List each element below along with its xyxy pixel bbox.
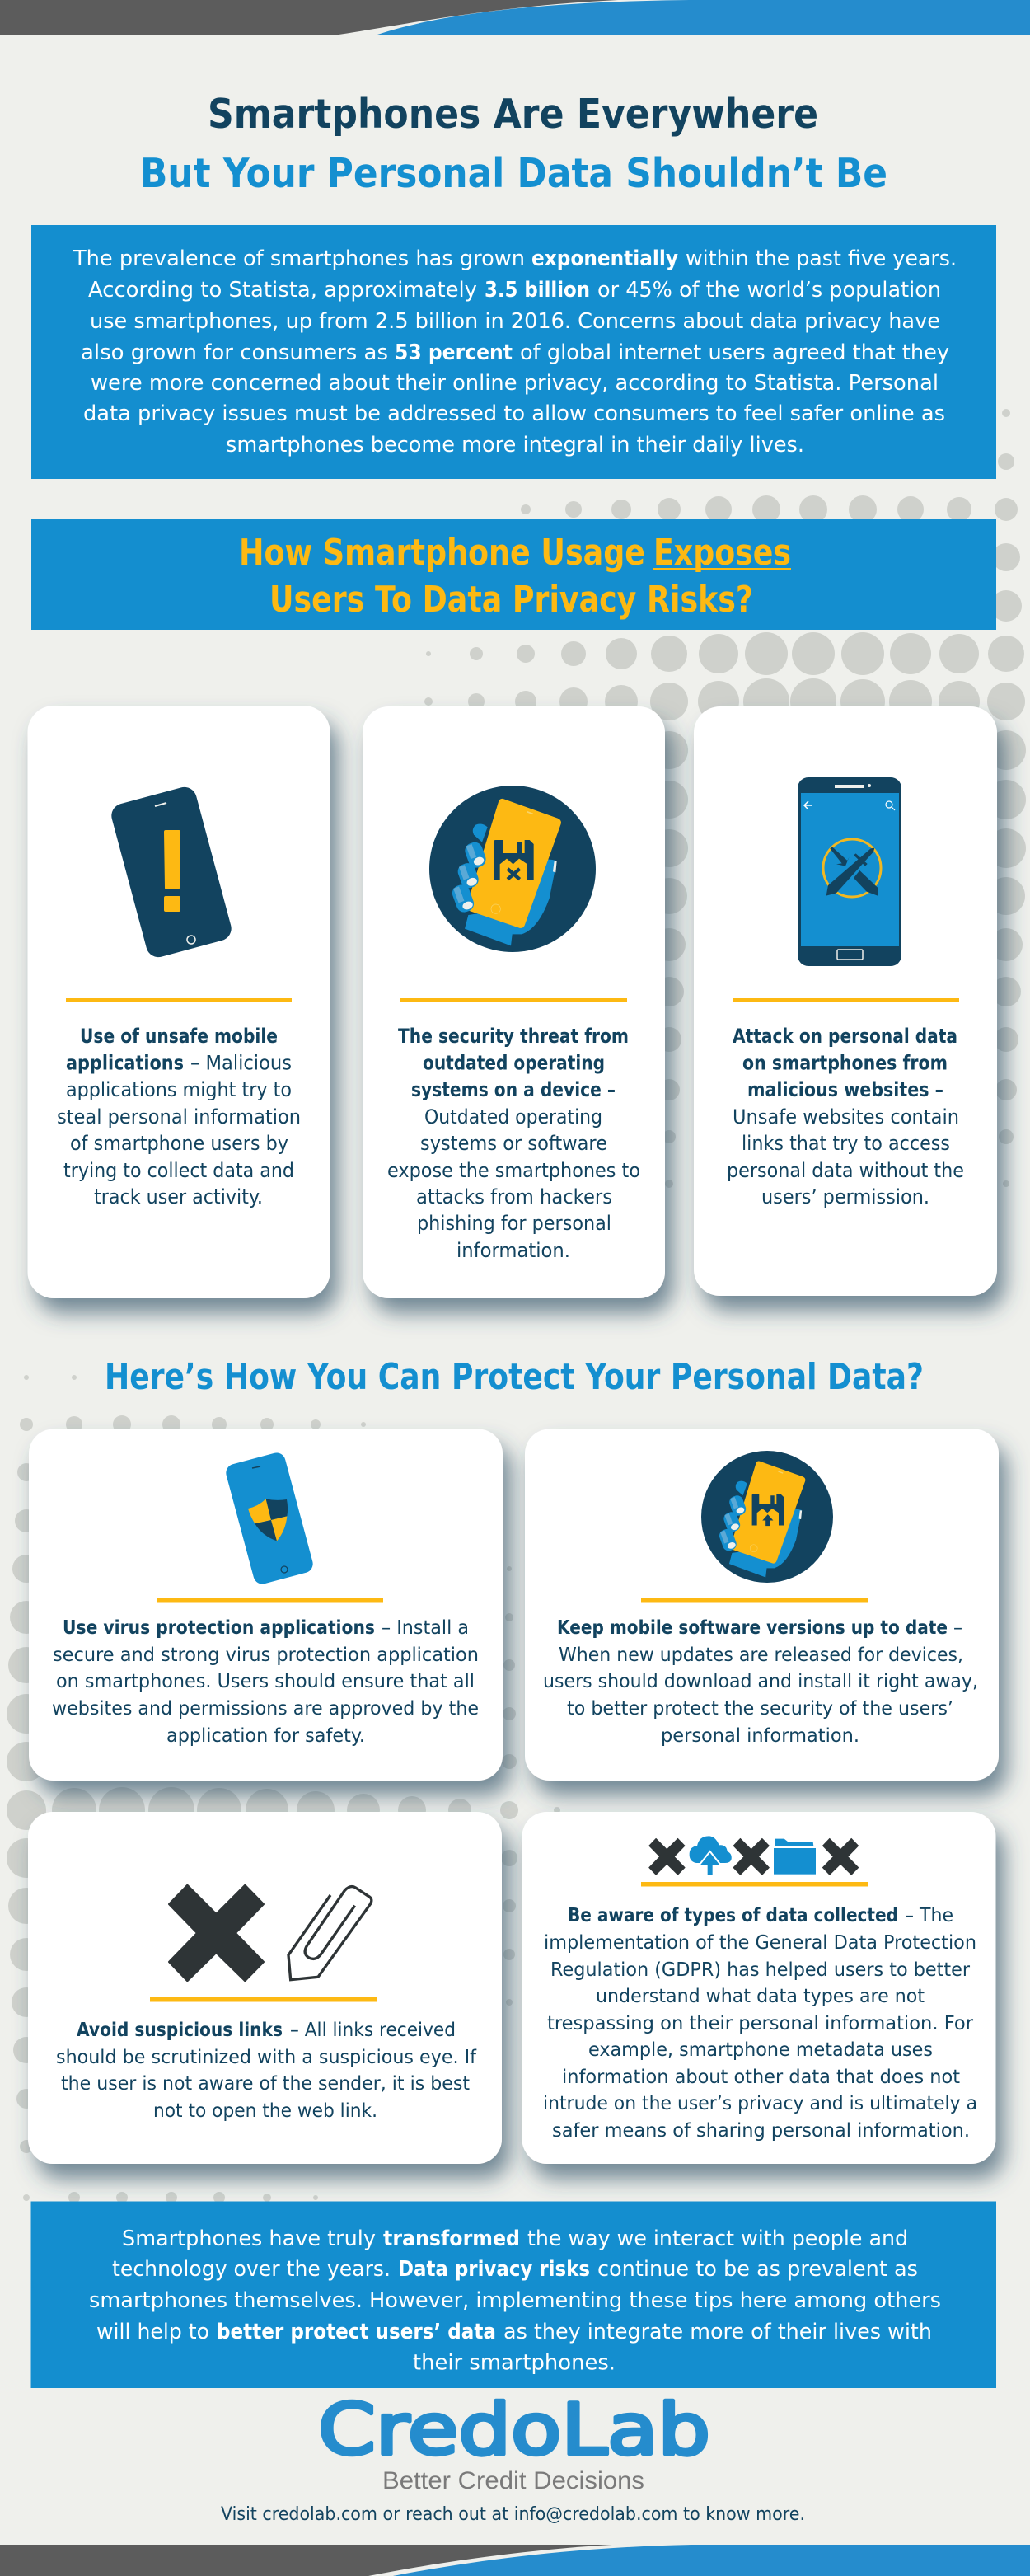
card text: malicious websites – (747, 1078, 943, 1101)
card text: trying to collect data and (63, 1159, 294, 1182)
top banner swoosh (0, 0, 1030, 35)
bottom banner swoosh (0, 2545, 1030, 2576)
card text: information. (456, 1239, 570, 1262)
card text (387, 1025, 640, 1262)
heading text: How Smartphone Usage (239, 532, 645, 574)
halftone dots lower left (7, 1375, 560, 2203)
card text: the user is not aware of the sender, it is best (61, 2073, 470, 2095)
card text: Unsafe websites contain (733, 1105, 959, 1128)
panel: risks heading (31, 519, 996, 630)
card text: systems or software (420, 1132, 607, 1155)
card text: steal personal information (57, 1105, 301, 1128)
card text: trespassing on their personal information. For (547, 2013, 974, 2034)
title (140, 91, 887, 197)
card text: outdated operating (423, 1052, 605, 1075)
card text (56, 2020, 477, 2122)
panel: suspicious links (28, 1812, 502, 2164)
panel: outdated operating systems (363, 706, 665, 1298)
footer call to action: Visit credolab.com or reach out at info@credolab.com to know more. (221, 2504, 805, 2525)
card text (57, 1025, 301, 1208)
heading text (239, 532, 791, 621)
introduction text: 53 percent (395, 340, 513, 365)
introduction text: data privacy issues must be addressed to allow consumers to feel safer online as (83, 401, 945, 426)
card text: Attack on personal data (733, 1025, 957, 1048)
panel: conclusion (31, 2201, 996, 2388)
card text: – All links received (290, 2020, 456, 2041)
card text: understand what data types are not (596, 1986, 925, 2007)
card text: applications might try to (66, 1078, 292, 1101)
conclusion text: will help to (96, 2320, 209, 2344)
introduction text: 3.5 billion (485, 278, 590, 303)
logo wordmark: CredoLab (318, 2389, 710, 2471)
card text: Use of unsafe mobile (80, 1025, 278, 1048)
card text: Use virus protection applications (63, 1617, 375, 1639)
card text: safer means of sharing personal information. (552, 2120, 970, 2142)
introduction text: According to Statista, approximately (88, 278, 477, 303)
introduction text: were more concerned about their online privacy, according to Statista. Personal (91, 371, 939, 396)
conclusion text: transformed (383, 2226, 520, 2251)
logo tagline: Better Credit Decisions (382, 2467, 644, 2494)
card text: secure and strong virus protection application (53, 1645, 479, 1666)
panel: software updates (525, 1429, 999, 1781)
card text: intrude on the user’s privacy and is ultimately a (543, 2093, 977, 2114)
icon: phone with crossed swords (798, 777, 901, 966)
card text: of smartphone users by (70, 1132, 288, 1155)
card text: phishing for personal (417, 1212, 611, 1235)
conclusion text (89, 2226, 941, 2376)
card text: track user activity. (94, 1185, 263, 1208)
title: Smartphones Are Everywhere (208, 91, 818, 138)
card text: on smartphones. Users should ensure that all (56, 1671, 475, 1692)
card text: websites and permissions are approved by the (52, 1698, 479, 1720)
conclusion text: as they integrate more of their lives with (503, 2320, 932, 2344)
conclusion text: technology over the years. (112, 2257, 391, 2282)
card text (52, 1617, 479, 1747)
introduction text: within the past five years. (686, 246, 957, 271)
card text: users’ permission. (761, 1185, 929, 1208)
card text: links that try to access (742, 1132, 950, 1155)
card text: applications (66, 1052, 184, 1075)
introduction text: smartphones become more integral in their daily lives. (226, 433, 804, 457)
card text: – The (905, 1905, 953, 1926)
card text: personal data without the (727, 1159, 964, 1182)
card text: expose the smartphones to (387, 1159, 640, 1182)
card text: – Install a (382, 1617, 469, 1639)
card text: implementation of the General Data Protection (544, 1932, 976, 1954)
introduction text: exponentially (531, 246, 678, 271)
card text: on smartphones from (742, 1052, 948, 1075)
conclusion text: their smartphones. (413, 2351, 616, 2376)
conclusion text: Smartphones have truly (122, 2226, 376, 2251)
card text (543, 1617, 978, 1747)
icon: crosses with cloud and folder (649, 1836, 859, 1875)
title: But Your Personal Data Shouldn’t Be (140, 150, 887, 197)
conclusion text: the way we interact with people and (527, 2226, 908, 2251)
introduction text: use smartphones, up from 2.5 billion in 2016. Concerns about data privacy have (90, 309, 940, 334)
panel: virus protection (29, 1429, 503, 1781)
introduction text: also grown for consumers as (81, 340, 388, 365)
card text: to better protect the security of the users’ (567, 1698, 953, 1720)
card text: When new updates are released for devices, (559, 1645, 963, 1666)
card text: Avoid suspicious links (77, 2020, 283, 2041)
card text: Keep mobile software versions up to date (557, 1617, 948, 1639)
icon: phone with exclamation mark (109, 785, 234, 960)
icon: hand holding phone with damaged floppy (429, 786, 596, 952)
panel: malicious websites (694, 706, 997, 1296)
introduction text (73, 246, 957, 457)
card text: Outdated operating (424, 1105, 602, 1128)
card text: attacks from hackers (416, 1185, 612, 1208)
conclusion text: better protect users’ data (217, 2320, 496, 2344)
panel: introduction (31, 225, 996, 479)
card text: The security threat from (398, 1025, 629, 1048)
panel: types of data collected (522, 1812, 995, 2164)
halftone dots upper right (424, 409, 1026, 1188)
heading text: Users To Data Privacy Risks? (269, 579, 753, 621)
card text: application for safety. (166, 1725, 365, 1747)
heading text: Exposes (653, 532, 791, 574)
icon: cross and paperclip (169, 1885, 372, 1981)
card text: systems on a device – (411, 1078, 616, 1101)
card text: Be aware of types of data collected (568, 1905, 898, 1926)
card text: not to open the web link. (153, 2100, 377, 2122)
card text (727, 1025, 964, 1208)
card text: users should download and install it right away, (543, 1671, 978, 1692)
conclusion text: Data privacy risks (398, 2257, 590, 2282)
card text: information about other data that does not (562, 2067, 960, 2088)
introduction text: or 45% of the world’s population (597, 278, 941, 303)
icon: hand holding phone with floppy upload (701, 1451, 833, 1583)
icon: phone with shield (224, 1451, 315, 1586)
card text: – (953, 1617, 962, 1639)
conclusion text: continue to be as prevalent as (597, 2257, 918, 2282)
card text: personal information. (661, 1725, 859, 1747)
card text: should be scrutinized with a suspicious eye. If (56, 2047, 477, 2068)
card text (543, 1905, 977, 2142)
card text: example, smartphone metadata uses (588, 2039, 933, 2061)
card text: Regulation (GDPR) has helped users to better (550, 1959, 971, 1981)
panel: unsafe mobile applications (28, 706, 330, 1298)
conclusion text: smartphones themselves. However, implementing these tips here among others (89, 2288, 941, 2313)
introduction text: of global internet users agreed that they (520, 340, 949, 365)
introduction text: The prevalence of smartphones has grown (73, 246, 525, 271)
card text: – Malicious (190, 1052, 292, 1075)
